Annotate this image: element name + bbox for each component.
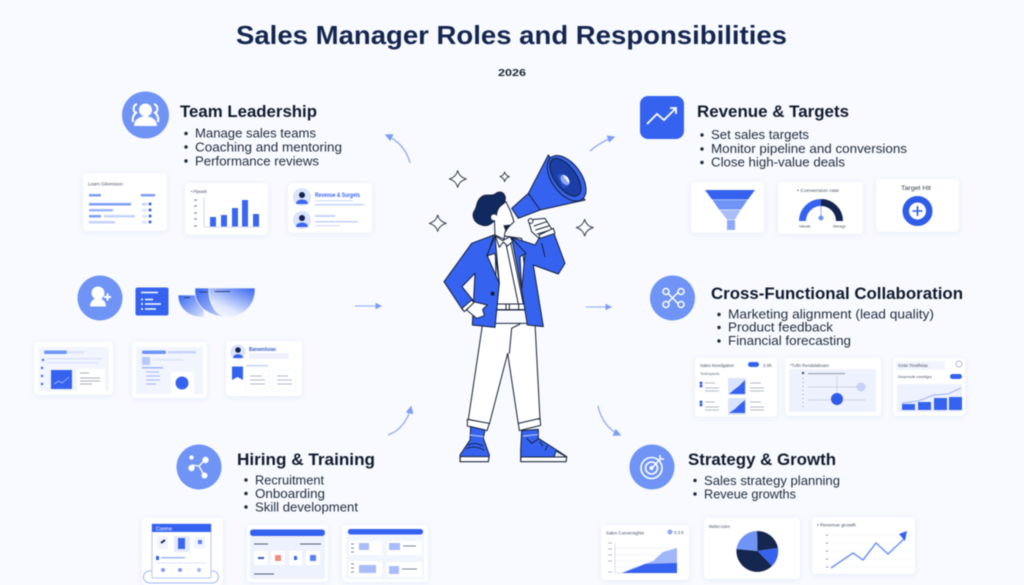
arrow: up-right bbox=[590, 137, 614, 151]
right hand bbox=[528, 218, 553, 238]
icon: overlapping bowls bbox=[178, 288, 255, 317]
icon: network bbox=[176, 444, 222, 490]
bullet list: Manage sales teams bbox=[195, 126, 317, 140]
collar and head bbox=[495, 236, 513, 247]
card: revenue growth line chart: • Revenue growth bbox=[817, 522, 857, 528]
bullet list: Sales strategy planning bbox=[704, 473, 840, 488]
arrow: up-left bbox=[386, 135, 410, 163]
megaphone bbox=[512, 149, 594, 218]
panel: team leadership bbox=[83, 92, 372, 235]
card: profiles bbox=[288, 183, 372, 233]
heading: Cross-Functional Collaboration bbox=[711, 284, 963, 303]
card: area chart: 0.3 k bbox=[674, 530, 685, 535]
card: team overview: Learn Gilomision bbox=[88, 182, 124, 186]
card: conversion gauge: • Conversion rate bbox=[797, 188, 840, 193]
panel: strategy and growth bbox=[601, 444, 915, 580]
bullet list bbox=[693, 473, 840, 502]
central figure: man with megaphone bbox=[429, 149, 594, 462]
bullet list: Marketing alignment (lead quality) bbox=[728, 306, 934, 322]
card: sales navigation bbox=[695, 358, 777, 417]
card: sales collaboration bbox=[785, 358, 881, 416]
bullet list: Close high-value deals bbox=[711, 154, 846, 170]
bullet list: Financial forecasting bbox=[728, 333, 851, 348]
card: conversion gauge: Manage bbox=[833, 224, 846, 228]
card: training schedule bbox=[342, 525, 428, 582]
icon: connected nodes bbox=[650, 276, 695, 320]
card: onboarding tools bbox=[247, 525, 328, 582]
card: document review bbox=[132, 342, 207, 398]
card: conversion gauge: Valuate bbox=[799, 224, 811, 228]
card: team overview bbox=[83, 173, 167, 231]
heading: Strategy & Growth bbox=[688, 450, 836, 469]
heading: Hiring & Training bbox=[237, 450, 375, 469]
card: area chart bbox=[601, 525, 689, 580]
card: sales forecast: Sonlan TNowllheitae bbox=[898, 363, 928, 368]
icon: trend chart bbox=[640, 96, 684, 139]
arrow: down-left bbox=[388, 407, 411, 435]
bullet list: Recruitment bbox=[255, 472, 324, 488]
card: sales navigation: Sales Novelgation bbox=[700, 363, 734, 368]
panel: revenue and targets bbox=[640, 96, 959, 234]
icon: add user bbox=[78, 276, 122, 320]
bullet list: Coaching and mentoring bbox=[195, 140, 342, 154]
card: bar chart: • Pipeash bbox=[191, 189, 207, 194]
card: profiles: Revenue & Surgets bbox=[315, 193, 361, 199]
card: sales collaboration: *Tufin Rendalaboarn bbox=[790, 363, 829, 368]
heading: Team Leadership bbox=[180, 102, 317, 121]
title: Sales Manager Roles and Responsibilities bbox=[236, 20, 787, 50]
card: market share pie chart bbox=[704, 518, 800, 579]
year: 2026 bbox=[498, 67, 526, 79]
card: sales navigation: Testimplants bbox=[700, 372, 720, 376]
card: profile with badge bbox=[226, 341, 302, 396]
card: revenue growth line chart bbox=[812, 517, 915, 574]
bullet list: Product feedback bbox=[728, 320, 834, 334]
icon: team bbox=[122, 92, 169, 138]
jacket bbox=[444, 232, 565, 327]
left hand bbox=[467, 302, 487, 318]
bullet list bbox=[717, 306, 934, 348]
bullet list: Onboarding bbox=[255, 486, 325, 501]
card: sales forecast: Despnvuile nownliges bbox=[898, 375, 932, 379]
icon: checklist bbox=[136, 288, 168, 316]
bullet list bbox=[700, 127, 908, 170]
bullet list: Monitor pipeline and conversions bbox=[711, 141, 908, 156]
card: area chart: Sales Conversights bbox=[606, 530, 645, 536]
card: pipeline summary bbox=[34, 342, 113, 395]
arrow: mid-right bbox=[586, 306, 611, 308]
trousers bbox=[468, 323, 540, 424]
card: sales forecast bbox=[893, 358, 965, 416]
card: target hit: Target Hit bbox=[901, 186, 931, 192]
card: market share pie chart: Market Aulers bbox=[709, 524, 731, 529]
heading: Revenue & Targets bbox=[697, 102, 849, 121]
card: target hit bbox=[876, 179, 959, 232]
shirt and neck bbox=[495, 235, 528, 310]
arrow: mid-left bbox=[355, 305, 381, 307]
card: bar chart bbox=[185, 183, 268, 235]
bullet list: Reveue growths bbox=[704, 486, 796, 502]
shoes bbox=[460, 427, 567, 462]
card: course: Conme bbox=[156, 526, 172, 532]
bullet list bbox=[184, 126, 342, 168]
bullet list bbox=[244, 472, 358, 514]
card: conversion gauge bbox=[778, 182, 863, 234]
panel: unlabelled team tools bbox=[34, 276, 302, 398]
panel: hiring and training bbox=[142, 444, 428, 585]
belt bbox=[497, 304, 527, 310]
card: course bbox=[142, 518, 223, 585]
bullet list: Skill development bbox=[255, 500, 358, 514]
icon: target bbox=[630, 444, 674, 490]
icon: sparkles bbox=[429, 171, 593, 236]
bullet list: Set sales targets bbox=[711, 127, 810, 142]
panel: cross-functional collaboration bbox=[650, 276, 965, 417]
card: funnel bbox=[691, 182, 764, 233]
card: sales navigation: 2.0h bbox=[763, 363, 772, 368]
bullet list: Performance reviews bbox=[195, 154, 319, 168]
arrow: down-right bbox=[598, 406, 620, 435]
card: profile with badge: Banwmiisian bbox=[249, 347, 276, 353]
